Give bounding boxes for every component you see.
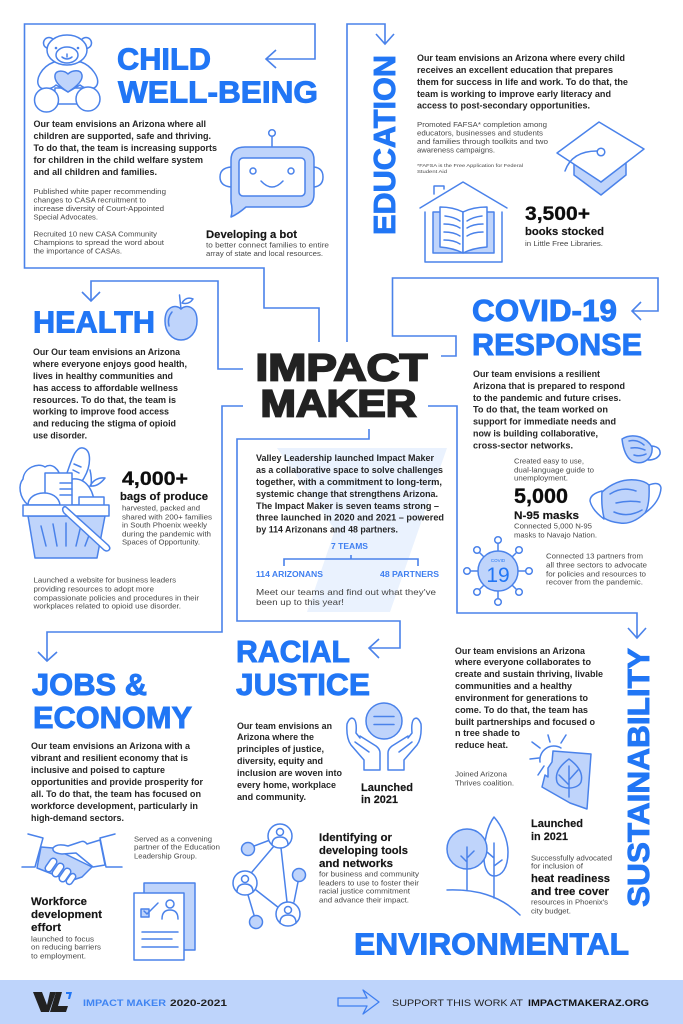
text block: tools and networks: racial justice commitment (319, 886, 410, 896)
text block: sustainability vision: communities and a healthy (455, 681, 573, 692)
icon: covid-19 virus: 19 (486, 564, 510, 587)
connector line: sustainability frame (428, 406, 646, 638)
text block: tools and networks: leaders to use to foster their (319, 878, 420, 888)
text block: launched in 2021 (531, 818, 583, 843)
stat: 4,000+ bags of produce (120, 469, 212, 546)
text block: workforce development effort: effort (31, 922, 61, 934)
chart: team structure tree: 7 TEAMS (331, 541, 368, 551)
text block: health vision: use disorder. (33, 430, 87, 442)
text block: casa champions: Champions to spread the word about (34, 238, 164, 247)
heading: jobs and economy (32, 668, 192, 735)
icon: house with book (420, 182, 507, 262)
text block: white paper: Special Advocates. (34, 212, 98, 222)
text block: jobs vision: inclusive and poised to capture (31, 765, 165, 776)
text block: intro: The Impact Maker is seven teams strong – (256, 501, 439, 512)
icon: resume document (134, 883, 195, 960)
heading: impact maker: IMPACT (256, 348, 428, 390)
connector line: education (347, 24, 394, 342)
text block: jobs vision: vibrant and resilient economy that is (31, 753, 188, 764)
panel: impact maker intro (256, 348, 447, 612)
text block: white paper: changes to CASA recruitment to (34, 196, 146, 204)
text block: jobs vision (30, 741, 203, 824)
text block: racial justice vision (237, 721, 342, 803)
footer label: impact maker 2020-2021: IMPACT MAKER (83, 998, 166, 1009)
text block: website for business leaders: workplaces related to opioid use disorder. (32, 602, 181, 610)
stat: 5,000 n-95 masks: N-95 masks (514, 510, 579, 522)
text block: education vision: receives an excellent education that prepares (417, 65, 613, 76)
footer call to action (392, 998, 649, 1009)
text block: website for business leaders: providing resources to adopt more (34, 584, 154, 594)
icon: hands holding equals sign (347, 703, 421, 770)
heading: education: EDUCATION (368, 55, 402, 235)
text block: developing a bot (206, 229, 329, 258)
text block: health vision: working to improve food access (32, 406, 169, 418)
text block: workforce development effort: Workforce (31, 896, 87, 908)
text block: workforce development effort: to employment. (31, 952, 86, 960)
text block: tools and networks: developing tools (319, 845, 408, 857)
text block: covid vision (473, 369, 625, 452)
text block: website for business leaders: Launched a website for business leaders (34, 576, 176, 584)
background shape: pale logo mark (277, 448, 447, 612)
text block: education leadership group: Served as a convening (134, 834, 212, 844)
icon: covid-19 virus (464, 537, 532, 605)
text block: fafsa: awareness campaigns. (417, 146, 495, 154)
icon: apple (165, 295, 197, 340)
text block: intro: together, with a commitment to long-term, (256, 477, 442, 488)
text block: covid vision: Arizona that is prepared to respond (473, 381, 625, 392)
text block: health vision: has access to affordable wellness (33, 383, 178, 394)
text block: 13 partners: for policies and resources to (546, 570, 646, 578)
heading: racial justice: JUSTICE (236, 668, 370, 702)
heading: covid-19 response (472, 294, 642, 362)
connector line: covid frame (392, 278, 658, 356)
stat: 5,000 n-95 masks (514, 485, 597, 540)
text block: arizona thrives (455, 770, 514, 788)
footer label: impact maker 2020-2021: 2020-2021 (170, 998, 228, 1009)
text block: sustainability vision: create and sustain thriving, livable (455, 669, 603, 680)
text block: 13 partners (546, 552, 647, 586)
text block: workforce development effort: launched to focus (31, 934, 94, 944)
chart: team structure tree: 114 ARIZONANS (256, 569, 323, 579)
text block: education vision: Our team envisions an Arizona where every child (417, 53, 625, 64)
icon: teddy bear (34, 35, 100, 112)
stat: 4,000+ bags of produce: in South Phoenix weekly (122, 520, 207, 530)
icon: arizona state with sun and leaf (530, 735, 591, 809)
text block: heat readiness and tree cover: for inclusion of (531, 862, 584, 870)
text block: jobs vision: high-demand sectors. (31, 813, 124, 824)
text block: racial justice vision: Our team envisions an (237, 721, 332, 732)
stat: 5,000 n-95 masks: 5,000 (514, 485, 568, 508)
text block: education leadership group (134, 834, 220, 860)
chart: team structure tree: 48 PARTNERS (380, 569, 439, 579)
heading: covid-19 response: COVID-19 (472, 294, 617, 328)
text block: sustainability vision: n tree shade to (455, 728, 520, 739)
text block: child well-being vision: for children in the child welfare system (34, 155, 203, 166)
text block: covid vision: to the pandemic and future crises. (473, 393, 621, 404)
panel: covid-19 response (464, 294, 661, 605)
text block: fafsa: educators, businesses and students (417, 128, 543, 138)
text block: fafsa: *FAFSA is the Free Application for Federal (417, 163, 523, 169)
icon: people network (233, 824, 306, 928)
text block: education vision: team is working to improve early literacy and (417, 89, 611, 100)
text block: education leadership group: Leadership Group. (134, 852, 197, 860)
heading: impact maker (256, 348, 428, 426)
text block: white paper: Published white paper recommending (34, 187, 166, 196)
text block: racial justice vision: inclusion are woven into (237, 768, 342, 779)
text block: launched in 2021 (361, 782, 413, 806)
text block: sustainability vision: reduce heat. (455, 740, 508, 751)
text block: tools and networks: and advance their impact. (319, 896, 409, 904)
text block: health vision: resources. To do that, the team is (33, 395, 176, 406)
text block: education vision: access to post-secondary opportunities. (417, 100, 590, 112)
icon: handshake (22, 834, 122, 886)
heading: sustainability: SUSTAINABILITY (622, 648, 656, 907)
text block: launched in 2021: Launched (531, 818, 583, 830)
panel: education (368, 53, 644, 262)
heading: child well-being (117, 42, 318, 110)
stat: 3,500+ books: 3,500+ (525, 204, 590, 225)
text block: jobs vision: Our team envisions an Arizona with a (31, 741, 191, 752)
text block: health vision: lives in healthy communities and (33, 371, 173, 382)
text block: casa champions: Recruited 10 new CASA Community (34, 230, 157, 238)
text block: racial justice vision: and community. (237, 792, 306, 803)
text block: heat readiness and tree cover: Successfully advocated (531, 854, 612, 862)
stat: 5,000 n-95 masks: Connected 5,000 N-95 (514, 522, 592, 530)
text block: sustainability vision: built partnerships and focused o (455, 717, 595, 728)
panel: health (20, 295, 212, 610)
text block: covid vision: now is building collaborative, (473, 428, 598, 440)
stat: 3,500+ books: books stocked (525, 226, 604, 238)
text block: covid vision: To do that, the team worked on (473, 404, 608, 416)
icon: produce basket (20, 448, 110, 558)
text block: intro (256, 453, 444, 536)
text block: racial justice vision: Arizona where the (237, 732, 314, 743)
text block: jobs vision: all. To do that, the team has focused on (31, 789, 201, 800)
stat: 4,000+ bags of produce: shared with 200+ families (122, 512, 212, 522)
text block: health vision: and reducing the stigma of opioid (33, 418, 176, 430)
text block: sustainability vision: where everyone collaborates to (454, 657, 591, 668)
text block: sustainability vision (454, 646, 603, 751)
text block: white paper (34, 187, 166, 222)
connector line: intro and racial justice frame (237, 429, 400, 658)
icon: robot chat bubble (220, 130, 323, 217)
text block: covid vision: support for immediate needs and (473, 416, 616, 428)
heading: racial justice: RACIAL (236, 635, 350, 669)
text block: education vision: them for success in life and work. To do that, the (417, 77, 628, 88)
text block: intro: by 114 Arizonans and 48 partners. (256, 524, 398, 536)
logo: VL (33, 992, 72, 1012)
text block: fafsa (417, 120, 548, 175)
text block: child well-being vision: To do that, the team is increasing supports (34, 143, 217, 154)
text block: racial justice vision: principles of justice, (237, 744, 324, 755)
text block: sustainability vision: come. To do that, the team has (455, 705, 588, 716)
text block: health vision: Our Our team envisions an Arizona (33, 347, 181, 358)
text block: fafsa: and families through toolkits and two (417, 137, 548, 146)
text block: meet our teams (256, 587, 436, 607)
text block: covid vision: cross-sector networks. (473, 440, 573, 452)
heading: environmental: ENVIRONMENTAL (354, 928, 629, 962)
text block: intro: as a collaborative space to solve challenges (256, 465, 443, 476)
text block: tools and networks: Identifying or (319, 832, 393, 844)
text block: intro: three launched in 2020 and 2021 – powered (256, 512, 444, 524)
panel: racial justice (233, 635, 421, 928)
text block: sustainability vision: environment for generations to (455, 693, 588, 704)
icon: trees on a hill (447, 817, 520, 915)
text block: intro: systemic change that strengthens Arizona. (256, 489, 438, 500)
stat: 3,500+ books: in Little Free Libraries. (525, 239, 603, 248)
text block: 13 partners: recover from the pandemic. (546, 578, 643, 586)
text block: website for business leaders (32, 576, 200, 610)
text block: tools and networks (319, 832, 420, 904)
footer band (0, 980, 683, 1024)
text block: education vision (417, 53, 628, 112)
text block: jobs vision: opportunities and provide prosperity for (31, 777, 203, 788)
text block: fafsa: Promoted FAFSA* completion among (417, 120, 547, 129)
text block: launched in 2021: in 2021 (531, 831, 568, 843)
text block: meet our teams: been up to this year! (256, 597, 344, 607)
text block: jobs vision: workforce development, particularly in (30, 801, 198, 812)
text block: health vision (32, 347, 187, 442)
text block: tools and networks: and networks (319, 858, 393, 870)
text block: heat readiness and tree cover: and tree cover (531, 886, 610, 898)
connector line: health frame (82, 281, 243, 369)
text block: tools and networks: for business and community (319, 870, 419, 878)
text block: heat readiness and tree cover (531, 854, 612, 916)
text block: 13 partners: Connected 13 partners from (546, 552, 643, 560)
text block: developing a bot: to better connect families to entire (206, 240, 329, 250)
heading: racial justice (236, 635, 370, 702)
icon: covid-19 virus: COVID (491, 558, 506, 563)
heading: jobs and economy: ECONOMY (33, 701, 192, 735)
panel: environmental sustainability (354, 646, 656, 962)
text block: arizona thrives: Thrives coalition. (455, 778, 514, 788)
stat: 3,500+ books (525, 204, 604, 248)
text block: education leadership group: partner of the Education (134, 842, 220, 852)
stat: 5,000 n-95 masks: masks to Navajo Nation. (514, 530, 597, 540)
text block: child well-being vision (34, 119, 217, 178)
stat: 4,000+ bags of produce: during the pandemic with (122, 530, 211, 538)
text block: workforce development effort: development (31, 909, 102, 921)
stat: 4,000+ bags of produce: 4,000+ (122, 469, 188, 490)
stat: 4,000+ bags of produce: Spaces of Opportunity. (122, 538, 200, 546)
text block: developing a bot: array of state and local resources. (206, 249, 323, 258)
text block: child well-being vision: children are supported, safe and thriving. (34, 131, 211, 142)
text block: unemployment guide (514, 456, 594, 482)
text block: unemployment guide: Created easy to use, (514, 456, 584, 466)
text block: unemployment guide: unemployment. (514, 474, 568, 482)
heading: jobs and economy: JOBS & (32, 668, 147, 702)
text block: launched in 2021: Launched (361, 782, 413, 794)
chart: team structure tree (256, 541, 439, 579)
text block: arizona thrives: Joined Arizona (455, 770, 508, 778)
text block: intro: Valley Leadership launched Impact Maker (256, 453, 434, 464)
icon: outline arrow (338, 990, 379, 1014)
heading: child well-being: CHILD (117, 42, 211, 76)
text block: workforce development effort (31, 896, 102, 960)
text block: workforce development effort: on reducing barriers (31, 942, 101, 952)
stat: 4,000+ bags of produce: harvested, packed and (122, 504, 200, 512)
text block: heat readiness and tree cover: heat readiness (531, 873, 610, 885)
heading: covid-19 response: RESPONSE (472, 328, 642, 362)
icon: graduation cap (557, 122, 644, 195)
icon: large face mask (590, 480, 661, 523)
text block: heat readiness and tree cover: resources in Phoenix's (531, 898, 608, 906)
icon: small face mask (622, 436, 660, 463)
text block: child well-being vision: and all children and families. (34, 167, 157, 178)
footer label: impact maker 2020-2021 (83, 998, 228, 1009)
text block: casa champions (34, 230, 164, 256)
text block: covid vision: Our team envisions a resilient (473, 369, 601, 380)
text block: 13 partners: all three sectors to advocate (546, 560, 647, 570)
text block: casa champions: the importance of CASAs. (34, 246, 122, 256)
connector line: jobs frame (38, 406, 243, 661)
text block: fafsa: Student Aid (417, 169, 447, 175)
text block: racial justice vision: every home, workplace (237, 780, 336, 791)
text block: white paper: increase diversity of Court-Appointed (34, 204, 164, 213)
text block: sustainability vision: Our team envisions an Arizona (455, 646, 586, 657)
footer call to action: SUPPORT THIS WORK AT (392, 998, 523, 1009)
text block: meet our teams: Meet our teams and find out what they've (256, 587, 436, 597)
heading: health: HEALTH (33, 306, 155, 340)
panel: child well-being (34, 35, 329, 258)
text block: racial justice vision: diversity, equity and (237, 756, 323, 767)
heading: impact maker: MAKER (260, 384, 416, 426)
panel: jobs and economy (22, 668, 220, 960)
footer call to action: IMPACTMAKERAZ.ORG (528, 998, 649, 1009)
stat: 4,000+ bags of produce: bags of produce (120, 491, 208, 503)
connector line: child well-being frame (24, 24, 319, 342)
text block: website for business leaders: compassionate policies and procedures in their (34, 594, 200, 602)
text block: heat readiness and tree cover: city budget. (531, 906, 571, 916)
text block: health vision: where everyone enjoys good health, (32, 359, 187, 370)
heading: child well-being: WELL-BEING (118, 76, 318, 110)
text block: developing a bot: Developing a bot (206, 229, 297, 241)
text block: unemployment guide: dual-language guide to (514, 466, 594, 474)
text block: child well-being vision: Our team envisions an Arizona where all (34, 119, 206, 130)
text block: launched in 2021: in 2021 (361, 794, 398, 806)
